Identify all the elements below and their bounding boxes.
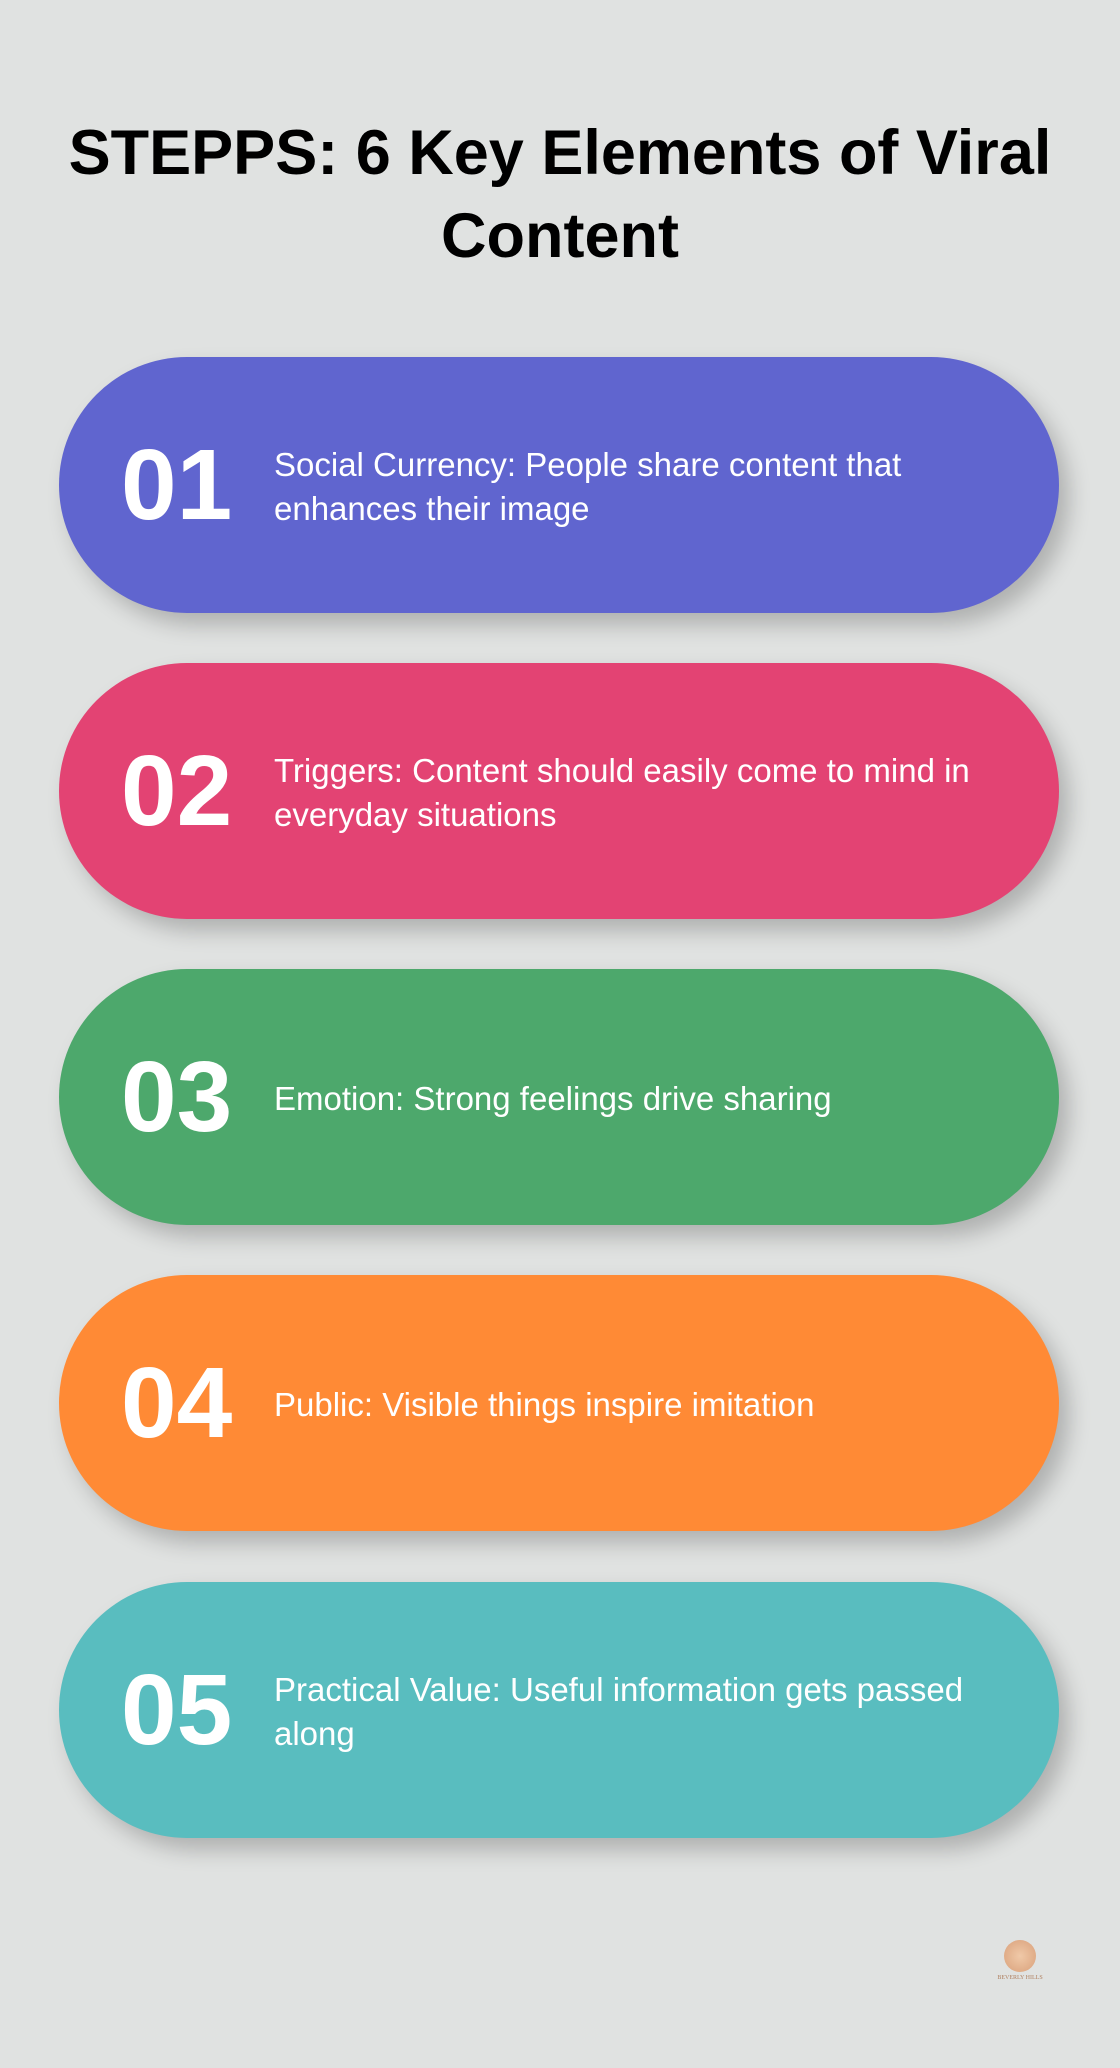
logo: BEVERLY HILLS [997, 1975, 1043, 1981]
number 03: 03 [121, 1041, 232, 1153]
text 01: Social Currency: People share content that [274, 446, 901, 483]
text 05 [274, 1671, 963, 1752]
title [69, 118, 1051, 271]
number 04: 04 [121, 1347, 232, 1459]
title: STEPPS: 6 Key Elements of Viral [69, 118, 1051, 188]
text 03: Emotion: Strong feelings drive sharing [274, 1080, 832, 1117]
panel: 03 emotion [59, 969, 1059, 1225]
number 05: 05 [121, 1654, 232, 1766]
text 01: enhances their image [274, 490, 590, 527]
text 04: Public: Visible things inspire imitation [274, 1386, 814, 1423]
text 05: Practical Value: Useful information gets passed [274, 1671, 963, 1708]
number 02: 02 [121, 735, 232, 847]
logo [997, 1940, 1043, 1981]
text 02 [274, 752, 970, 833]
text 02: Triggers: Content should easily come to mind in [274, 752, 970, 789]
text 02: everyday situations [274, 796, 556, 833]
text 01 [274, 446, 902, 527]
panel: 02 triggers [59, 663, 1059, 919]
panel: 04 public [59, 1275, 1059, 1531]
panel: 05 practical value [59, 1582, 1059, 1838]
panel: 01 social currency [59, 357, 1059, 613]
text 05: along [274, 1715, 355, 1752]
title: Content [441, 201, 679, 271]
number 01: 01 [121, 429, 232, 541]
